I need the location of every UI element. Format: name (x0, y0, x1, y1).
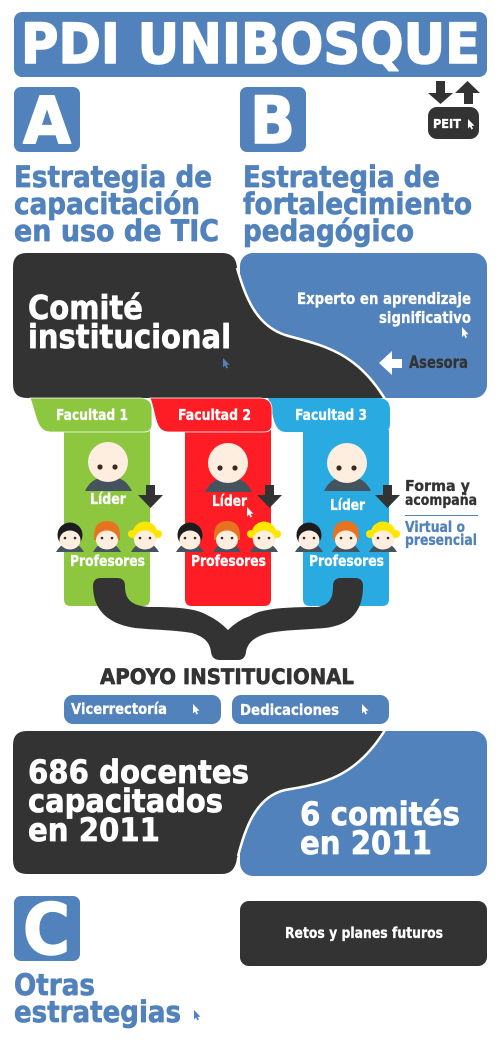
professors faculty 2: Profesores (191, 552, 266, 570)
heading: strategy A (14, 160, 219, 248)
leader 2 (205, 443, 254, 518)
leader 2: Líder (212, 492, 247, 510)
heading: institutional support: APOYO INSTITUCIONAL (100, 665, 354, 690)
heading: strategy B: pedagógico (243, 214, 414, 248)
professors faculty 2 (176, 521, 281, 570)
column: faculty 1: Facultad 1 (56, 406, 128, 424)
heading: strategy B (243, 160, 472, 248)
brace connector (93, 578, 363, 660)
leader 3: Líder (330, 496, 365, 514)
button: Vicerrectoría (64, 695, 221, 724)
panel: expert (240, 253, 487, 398)
panel: committees stat: en 2011 (300, 824, 432, 862)
heading: strategy A: en uso de TIC (14, 214, 219, 248)
badge B: B (250, 84, 295, 159)
heading: strategy A: Estrategia de (14, 160, 212, 194)
panel: institutional committee: Comité (28, 288, 143, 327)
badge C: C (23, 889, 70, 971)
panel: trained teachers stat: en 2011 (28, 811, 160, 849)
button: Vicerrectoría: Vicerrectoría (71, 700, 167, 718)
column: faculty 2: Facultad 2 (178, 406, 251, 424)
side note: training mode: Virtual o (405, 518, 465, 536)
heading: other strategies: Otras (14, 968, 95, 1002)
column: faculty 3 (268, 398, 390, 606)
panel: expert: Asesora (409, 353, 468, 372)
PEIT button with arrows (428, 81, 480, 139)
side note: training mode: presencial (405, 531, 477, 549)
professors faculty 3: Profesores (309, 552, 384, 570)
panel: committees stat (240, 731, 487, 876)
professors faculty 3 (295, 521, 400, 570)
arrow: down faculty 3 (375, 485, 400, 508)
panel: institutional committee (13, 253, 385, 399)
heading: other strategies (14, 968, 200, 1029)
panel: committees stat: 6 comités (300, 795, 460, 833)
button: Dedicaciones: Dedicaciones (240, 701, 339, 719)
arrow: down faculty 2 (257, 485, 282, 508)
side note: training mode: acompaña (405, 491, 477, 509)
side note: training mode (405, 477, 478, 549)
column: faculty 1 (30, 398, 152, 606)
leader 1 (85, 442, 132, 508)
heading: other strategies: estrategias (14, 995, 181, 1029)
button: challenges and future plans: Retos y planes futuros (285, 924, 443, 942)
badge A: A (23, 84, 71, 159)
button: challenges and future plans (240, 901, 487, 966)
panel: institutional committee: institucional (28, 317, 231, 356)
arrow: down faculty 1 (138, 485, 163, 508)
leader 1: Líder (90, 490, 126, 508)
leader 3 (324, 443, 371, 514)
professors faculty 1: Profesores (70, 552, 145, 570)
column: faculty 2 (150, 398, 272, 606)
heading: strategy B: Estrategia de (243, 160, 440, 194)
panel: trained teachers stat: capacitados (28, 782, 223, 820)
heading: strategy A: capacitación (14, 187, 200, 221)
column: faculty 3: Facultad 3 (295, 406, 367, 424)
button: Dedicaciones (232, 695, 389, 724)
side note: training mode: Forma y (405, 477, 470, 495)
panel: expert: significativo (379, 308, 471, 327)
panel: trained teachers stat (13, 730, 385, 874)
PEIT button with arrows: PEIT (433, 117, 462, 131)
heading: strategy B: fortalecimiento (243, 187, 472, 221)
panel: trained teachers stat: 686 docentes (28, 753, 249, 791)
professors faculty 1 (56, 521, 162, 570)
panel: expert: Experto en aprendizaje (297, 289, 471, 308)
